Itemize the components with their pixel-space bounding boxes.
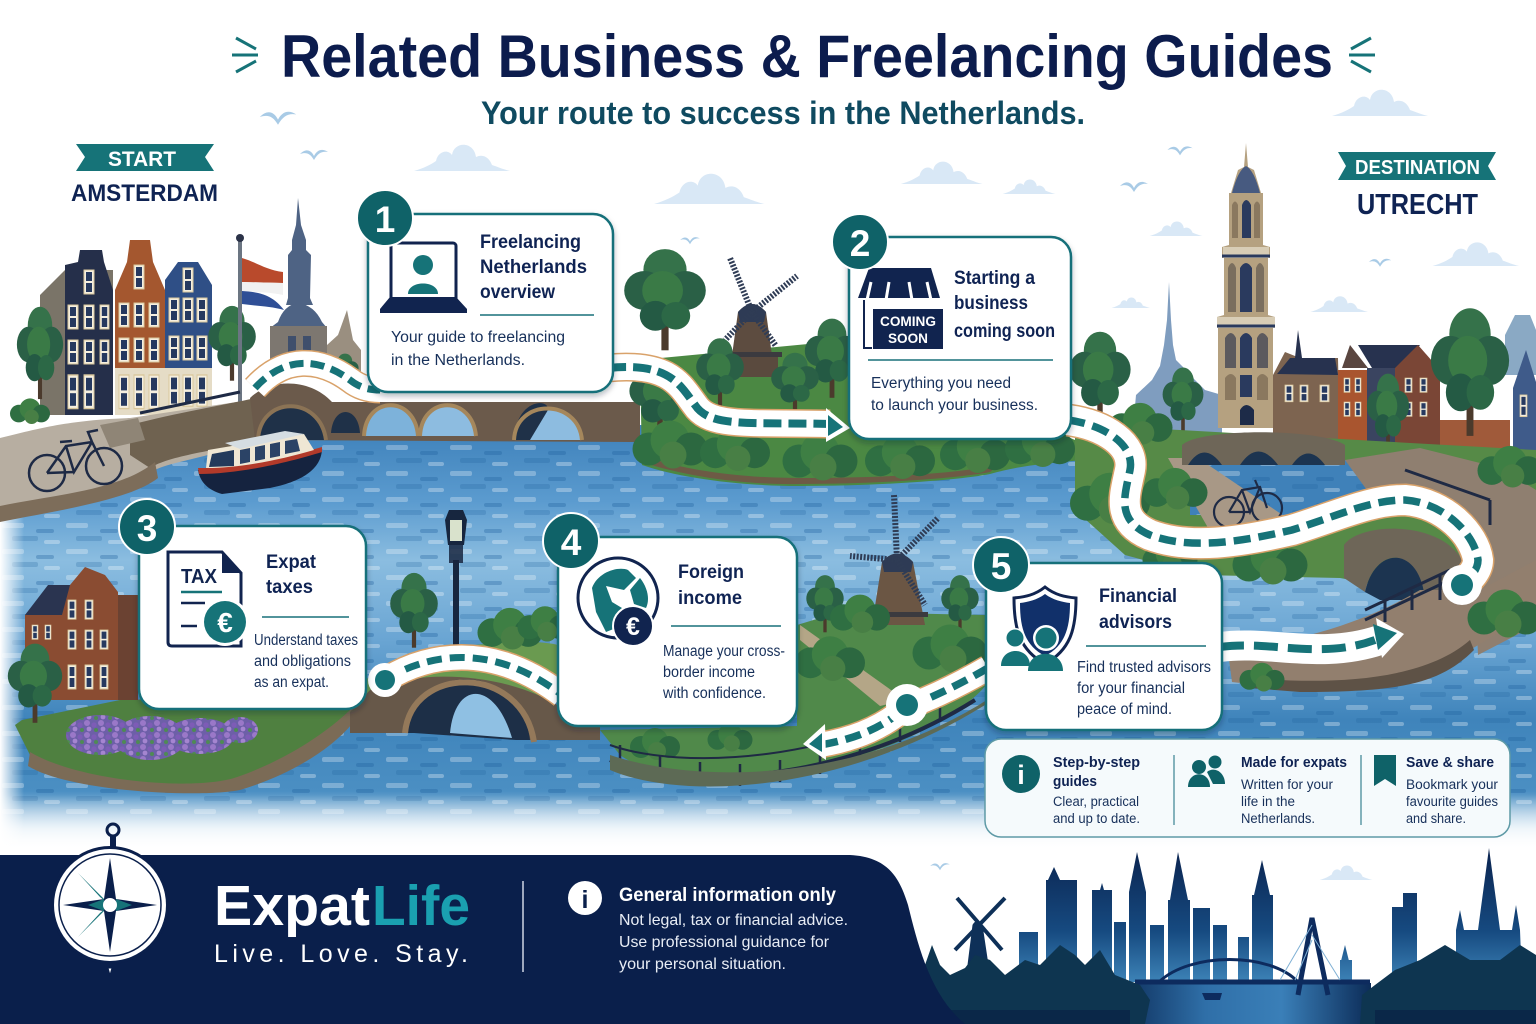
central island with trees and windmill: [624, 249, 1085, 486]
bicycle: Amsterdam: [29, 430, 122, 491]
step 3 heading: taxes: [266, 576, 313, 598]
badge: number 1: [357, 190, 413, 246]
start label: START: [108, 148, 176, 171]
icon: coming soon shop: COMING: [880, 313, 936, 329]
icon: info circle: i: [1017, 760, 1025, 790]
feature: made for expats: [1241, 755, 1347, 826]
skyline: windmill: [955, 898, 1005, 965]
step 2 heading: business: [954, 292, 1028, 314]
compass logo: [51, 824, 169, 975]
Amsterdam tree: [17, 307, 63, 399]
central lower island with windmill: [600, 495, 990, 786]
feature: step-by-step: Clear, practical: [1053, 794, 1139, 809]
panel: features: [985, 739, 1510, 837]
stone bridge: lower canal: [350, 677, 600, 742]
icon: laptop: [380, 243, 467, 313]
route ribbon: Amsterdam to step 1: [255, 363, 380, 390]
icon: coming soon shop: [858, 268, 943, 349]
water: canal: [0, 425, 1536, 850]
stone bridge: Amsterdam canal: [250, 383, 640, 442]
feature: made for expats: Made for expats: [1241, 755, 1347, 771]
icon: tax document with euro: [168, 552, 249, 646]
step 4 description: border income: [663, 664, 755, 681]
sky: clouds and birds: [260, 90, 1519, 880]
brand wordmark: Expat: [214, 874, 370, 938]
step 3 description: and obligations: [254, 653, 351, 670]
feature: save and share: and share.: [1406, 811, 1466, 826]
icon: footer info: i: [582, 886, 588, 914]
panel: step 2: [849, 237, 1071, 439]
title accent left: [232, 38, 258, 72]
feature: made for expats: life in the: [1241, 794, 1295, 809]
icon: info circle: [1002, 755, 1040, 793]
step 4 description: with confidence.: [662, 685, 766, 702]
icon: globe with euro: [578, 558, 658, 646]
step 5 description: for your financial: [1077, 680, 1185, 697]
greenery behind lower-left bridge with street lamp: [366, 510, 572, 700]
feature: save and share: favourite guides: [1406, 794, 1498, 809]
skyline: bridge and water: [1116, 918, 1371, 1024]
step 1 heading: overview: [480, 281, 556, 303]
feature: step-by-step: [1053, 755, 1140, 826]
badge: number 2: [832, 214, 888, 270]
badge: number 3: [119, 499, 175, 555]
step 1 heading: Netherlands: [480, 256, 587, 278]
destination label: [1338, 152, 1496, 221]
badge: number 2: 2: [850, 223, 870, 264]
title: Related Business & Freelancing Guides: [281, 23, 1333, 90]
canal boat: [198, 431, 322, 494]
feature: made for expats: Netherlands.: [1241, 811, 1315, 826]
step 5 description: peace of mind.: [1077, 701, 1172, 718]
step 5 description: Find trusted advisors: [1077, 659, 1211, 676]
subtitle: Your route to success in the Netherlands.: [481, 95, 1085, 131]
panel: step 1: [368, 214, 613, 392]
step 1 description: Your guide to freelancing: [391, 329, 565, 346]
Amsterdam canal houses: [40, 240, 212, 415]
windmill: upper: [722, 258, 797, 377]
step 4 heading: Foreign: [678, 561, 744, 583]
badge: number 4: [543, 513, 599, 569]
step 1 description: in the Netherlands.: [391, 352, 525, 369]
footer panel: [0, 855, 965, 1024]
start label: [71, 144, 218, 207]
Dom tower, Utrecht: [1217, 143, 1275, 428]
panel: step 4: [558, 537, 797, 726]
disclaimer: General information only: [619, 885, 836, 906]
windmill: lower: [850, 495, 938, 625]
step 2 heading: Starting a: [954, 267, 1035, 289]
Utrecht skyline: distant blue church: [1132, 282, 1222, 440]
start label: AMSTERDAM: [71, 180, 218, 207]
destination label: DESTINATION: [1355, 157, 1480, 179]
route ribbon: step 5 onward arrow: [1220, 618, 1404, 658]
step 3 description: Understand taxes: [254, 632, 358, 649]
feature: save and share: Bookmark your: [1406, 777, 1498, 792]
badge: number 5: [973, 537, 1029, 593]
icon: shield with advisors: [1001, 587, 1076, 671]
feature: step-by-step: and up to date.: [1053, 811, 1140, 826]
feature: save and share: Save & share: [1406, 755, 1494, 771]
feature: step-by-step: Step-by-step: [1053, 755, 1140, 771]
route ribbon: step 1 to step 2: [608, 367, 850, 442]
step 2 description: Everything you need: [871, 375, 1011, 392]
brand wordmark: Live. Love. Stay.: [214, 940, 468, 968]
disclaimer: Not legal, tax or financial advice.: [619, 912, 848, 929]
skyline: Rotterdam silhouette: [1019, 848, 1522, 982]
icon: people: [1188, 756, 1225, 787]
badge: number 4: 4: [561, 522, 582, 563]
left lower land: brick house, tree, flowers and quay: [8, 567, 352, 793]
disclaimer: [619, 885, 848, 973]
route ribbon: step 3 to step 4: [368, 658, 562, 697]
step 5 heading: advisors: [1099, 611, 1172, 633]
route ribbon: step 5 to step 4 arrow: [803, 668, 988, 760]
feature: made for expats: Written for your: [1241, 777, 1334, 792]
fence: Utrecht waterfront: [1365, 470, 1490, 622]
step 1 heading: Freelancing: [480, 231, 581, 253]
Amsterdam church tower: [208, 198, 361, 389]
disclaimer: Use professional guidance for: [619, 934, 830, 951]
icon: bookmark: [1374, 755, 1396, 786]
Utrecht land and quay: [1070, 403, 1536, 692]
left quay with steps: [0, 392, 260, 522]
title accent right: [1349, 38, 1375, 72]
bicycle: Utrecht: [1214, 480, 1282, 527]
icon: globe with euro: €: [626, 613, 640, 641]
destination label: UTRECHT: [1357, 189, 1478, 221]
step 3 heading: Expat: [266, 551, 316, 573]
disclaimer: your personal situation.: [619, 956, 786, 973]
icon: coming soon shop: SOON: [888, 330, 928, 346]
Dutch flag on pole: [236, 234, 284, 450]
badge: number 5: 5: [991, 546, 1011, 587]
icon: tax document with euro: TAX: [181, 566, 218, 588]
step 2 heading: coming soon: [954, 320, 1055, 342]
brand wordmark: [214, 874, 470, 968]
step 2 description: to launch your business.: [871, 397, 1038, 414]
badge: number 3: 3: [137, 508, 157, 549]
feature: save and share: [1406, 755, 1498, 826]
panel: step 5: [986, 563, 1222, 730]
skyline: tree silhouettes: [925, 945, 1536, 1024]
step 4 description: Manage your cross-: [663, 643, 785, 660]
Utrecht canal houses: [1069, 308, 1536, 453]
feature: step-by-step: guides: [1053, 774, 1097, 790]
badge: number 1: 1: [375, 199, 395, 240]
route ribbon: step 2 to Utrecht waypoint: [1068, 420, 1482, 605]
icon: tax document with euro: €: [217, 607, 233, 638]
step 5 heading: Financial: [1099, 585, 1177, 607]
step 4 heading: income: [678, 587, 742, 609]
panel: step 3: [139, 526, 366, 709]
brand wordmark: Life: [372, 874, 470, 938]
icon: footer info: [568, 881, 602, 915]
step 3 description: as an expat.: [254, 674, 329, 691]
